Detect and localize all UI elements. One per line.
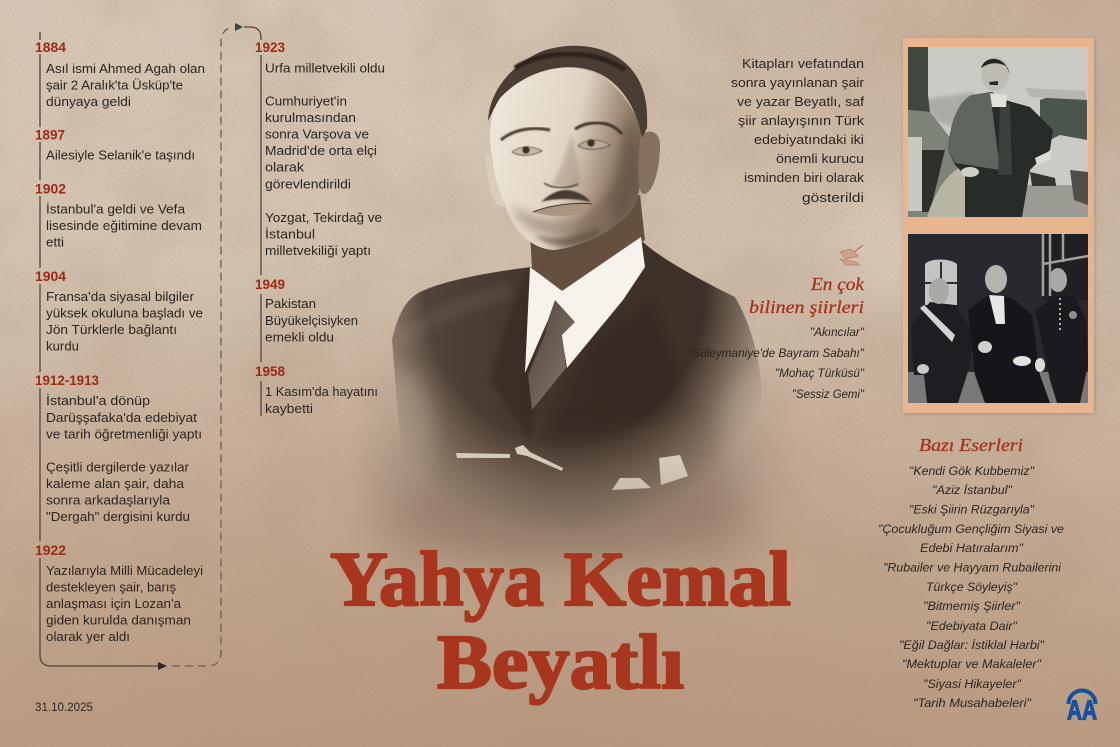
works list: Türkçe Söyleyiş" [926,582,1018,594]
works list [878,466,1064,710]
entry 1958 [255,363,378,416]
poems heading [749,274,865,317]
works list: "Edebiyata Dair" [926,621,1018,633]
eyes [512,139,610,155]
works heading: Bazı Eserleri [919,435,1023,455]
entry 1904: 1904 [35,268,66,284]
entry 1884: 1884 [35,39,66,55]
entry 1949: emekli oldu [265,330,334,344]
intro paragraph [731,57,865,205]
entry 1902: İstanbul'a geldi ve Vefa [46,202,185,216]
right ear [639,132,660,194]
entry 1923: görevlendirildi [265,178,351,192]
entry 1912-1913: ve tarih öğretmenliği yaptı [46,428,202,442]
timeline column 1 [35,39,205,644]
entry 1949: Pakistan [265,297,316,311]
entry 1902: etti [46,236,64,250]
entry 1923: sonra Varşova ve [265,128,369,142]
figure: centre in tailcoat [968,265,1050,403]
arrow: bottom connector [158,662,167,670]
entry 1902: 1902 [35,180,66,196]
entry 1922 [35,542,203,644]
entry 1912-1913: kaleme alan şair, daha [46,477,184,491]
pocket square and chain [456,445,688,490]
left column timeline line [40,32,166,666]
works list: "Tarih Musahabeleri" [913,698,1032,710]
poems list: "Mohaç Türküsü" [775,368,865,380]
poems list: "Akıncılar" [810,327,865,339]
portrait haze around lower body [380,385,760,555]
timeline column 2 [255,39,385,416]
entry 1949 [255,276,358,344]
photo panel [903,38,1095,414]
works list: "Eski Şiirin Rüzgarıyla" [909,504,1035,516]
entry 1922: olarak yer aldı [46,630,130,644]
intro paragraph: sonra yayınlanan şair [731,76,864,90]
entry 1884 [35,39,205,109]
entry 1884: şair 2 Aralık'ta Üsküp'te [46,78,183,92]
entry 1904: Jön Türklerle bağlantı [46,323,177,337]
entry 1958: 1 Kasım'da hayatını [265,385,378,399]
works list: "Mektuplar ve Makaleler" [902,659,1042,671]
works list: "Bitmemiş Şiirler" [923,601,1021,613]
entry 1922: anlaşması için Lozan'a [46,597,181,611]
timeline connector lines [40,23,261,670]
entry 1923: Madrid'de orta elçi [265,144,377,158]
eyebrows [501,129,550,140]
face shadows [555,115,639,250]
works list: "Kendi Gök Kubbemiz" [909,466,1035,478]
figure: right officer [1035,268,1088,403]
title [330,536,791,705]
dashed connector between columns [172,27,232,666]
neck [530,195,645,291]
entry 1923: Yozgat, Tekirdağ ve [265,211,382,225]
date: 31.10.2025 [35,702,93,714]
title: Beyatlı [437,619,684,705]
icon: Anadolu Agency logo: AA [1067,694,1097,726]
intro paragraph: gösterildi [802,191,864,205]
works list: "Çocukluğum Gençliğim Siyasi ve [878,524,1064,536]
entry 1949: Büyükelçisiyken [265,314,358,328]
entry 1912-1913: Darüşşafaka'da edebiyat [46,411,198,425]
works list: "Rubailer ve Hayyam Rubailerini [883,562,1061,574]
entry 1902 [35,180,202,250]
collar [525,237,645,373]
entry 1897 [35,126,195,162]
entry 1923: 1923 [255,39,285,55]
entry 1923: Urfa milletvekili oldu [265,62,385,76]
jacket [392,242,762,524]
poems heading: bilinen şiirleri [749,297,864,317]
entry 1884: dünyaya geldi [46,95,131,109]
entry 1912-1913 [35,372,202,524]
entry 1904 [35,268,203,354]
poems heading: En çok [810,274,865,294]
icon: Anadolu Agency logo [1067,690,1097,726]
intro paragraph: edebiyatındaki iki [754,133,864,147]
entry 1902: lisesinde eğitimine devam [46,219,202,233]
side fade of the jacket [365,370,790,510]
entry 1923: olarak [265,160,305,174]
poems list [688,327,865,401]
entry 1923: İstanbul [265,228,315,242]
entry 1923 [255,39,385,258]
entry 1912-1913: sonra arkadaşlarıyla [46,494,170,508]
entry 1904: kurdu [46,340,79,354]
intro paragraph: şiir anlayışının Türk [738,114,865,128]
entry 1923: kurulmasından [265,111,356,125]
entry 1922: Yazılarıyla Milli Mücadeleyi [46,564,203,578]
nose [552,135,580,187]
main portrait of Yahya Kemal [365,46,790,560]
entry 1912-1913: "Dergah" dergisini kurdu [46,510,190,524]
figure: left officer [911,278,972,403]
entry 1912-1913: İstanbul'a dönüp [46,394,150,408]
arrow: top connector [235,23,243,31]
intro paragraph: Kitapları vefatından [742,57,864,71]
head with face tones [490,67,643,250]
intro paragraph: önemli kurucu [776,152,864,166]
entry 1922: giden kurulda danışman [46,614,191,628]
intro paragraph: ve yazar Beyatlı, saf [737,95,865,109]
entry 1897: 1897 [35,126,65,142]
works list: "Aziz İstanbul" [932,485,1013,497]
right column timeline line [244,27,261,416]
works list: "Eğil Dağlar: İstiklal Harbi" [899,640,1045,652]
hair [488,46,647,138]
entry 1897: Ailesiyle Selanik'e taşındı [46,148,195,162]
poems section [688,274,865,401]
entry 1912-1913: Çeşitli dergilerde yazılar [46,460,189,474]
works section [878,435,1064,710]
poems list: "Süleymaniye'de Bayram Sabahı" [688,348,865,360]
entry 1922: destekleyen şair, barış [46,580,176,594]
works list: Edebi Hatıralarım" [920,543,1024,555]
works list: "Siyasi Hikayeler" [923,679,1022,691]
title: Yahya Kemal [330,536,791,622]
entry 1958: 1958 [255,363,285,379]
tie [528,300,575,410]
entry 1922: 1922 [35,542,66,558]
entry 1904: Fransa'da siyasal bilgiler [46,290,194,304]
entry 1912-1913: 1912-1913 [35,372,99,388]
entry 1949: 1949 [255,276,285,292]
lips [533,203,592,216]
left ear [485,155,505,207]
entry 1884: Asıl ismi Ahmed Agah olan [46,62,205,76]
entry 1923: milletvekiliği yaptı [265,244,371,258]
photo: Beyatlı standing outdoors [908,47,1088,217]
icon: quill and book [840,245,863,265]
poems list: "Sessiz Gemi" [792,389,865,401]
photo: Beyatlı with two officers [908,234,1088,403]
moustache [541,190,591,202]
entry 1904: yüksek okuluna başladı ve [46,306,203,320]
entry 1958: kaybetti [265,402,313,416]
entry 1923: Cumhuriyet'in [265,94,347,108]
intro paragraph: isminden biri olarak [744,171,865,185]
